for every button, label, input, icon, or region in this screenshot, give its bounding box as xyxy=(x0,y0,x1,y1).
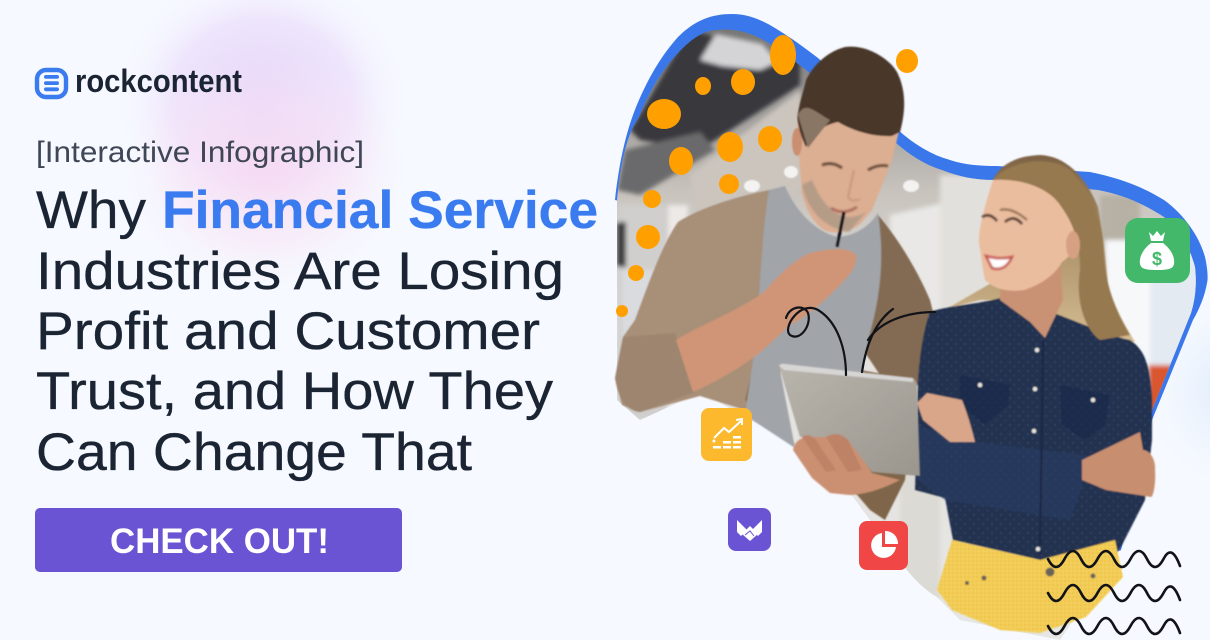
blue glow right xyxy=(1135,280,1210,500)
icon: handshake xyxy=(728,508,771,551)
orange dots xyxy=(616,35,918,317)
woman shirt xyxy=(915,298,1152,560)
office ceiling xyxy=(617,30,1200,600)
tablet xyxy=(779,364,920,476)
woman ear xyxy=(1066,231,1080,259)
man neck and face xyxy=(797,90,900,232)
wavy lines xyxy=(1048,551,1180,634)
icon: money bag xyxy=(1125,218,1190,283)
tablet and hand xyxy=(779,364,920,495)
man cardigan xyxy=(615,190,790,420)
title: Why xyxy=(36,181,147,240)
man arm and hand xyxy=(676,249,856,392)
woman neck xyxy=(1000,260,1063,338)
title: Profit and Customer xyxy=(36,302,540,361)
icon: growth chart xyxy=(701,408,752,461)
man xyxy=(615,47,940,520)
icon: pie chart xyxy=(859,521,908,570)
man t-shirt xyxy=(745,186,881,448)
scribble lines xyxy=(786,308,935,375)
icon: money bag: $ xyxy=(1152,249,1162,269)
title: Trust, and How They xyxy=(36,362,554,421)
photo scene xyxy=(600,0,1210,640)
woman hands xyxy=(917,393,975,442)
sleeve ribbing xyxy=(615,333,695,412)
logo: rockcontent: rockcontent xyxy=(75,63,242,99)
woman face xyxy=(979,177,1078,291)
woman shorts xyxy=(937,540,1123,633)
man eyes and mouth xyxy=(822,164,888,212)
title: Financial Service xyxy=(162,181,598,240)
man hair xyxy=(797,47,904,147)
button: check out xyxy=(35,508,402,572)
purple pink glow xyxy=(112,0,412,285)
title xyxy=(36,181,598,482)
woman hair back xyxy=(948,155,1135,345)
title: Industries Are Losing xyxy=(36,242,564,301)
blue blob frame xyxy=(615,14,1208,560)
button: check out: CHECK OUT! xyxy=(110,522,329,561)
man lower hand xyxy=(793,436,900,495)
eyebrow text: [Interactive Infographic] xyxy=(36,136,364,169)
woman xyxy=(915,155,1155,633)
woman eyes and smile xyxy=(982,209,1027,269)
fingers xyxy=(802,434,862,472)
shirt buttons xyxy=(978,348,1095,551)
title: Can Change That xyxy=(36,423,472,482)
pen xyxy=(837,212,844,247)
man ear xyxy=(792,128,802,156)
woman front hair xyxy=(993,161,1130,340)
photo background xyxy=(600,0,1210,640)
